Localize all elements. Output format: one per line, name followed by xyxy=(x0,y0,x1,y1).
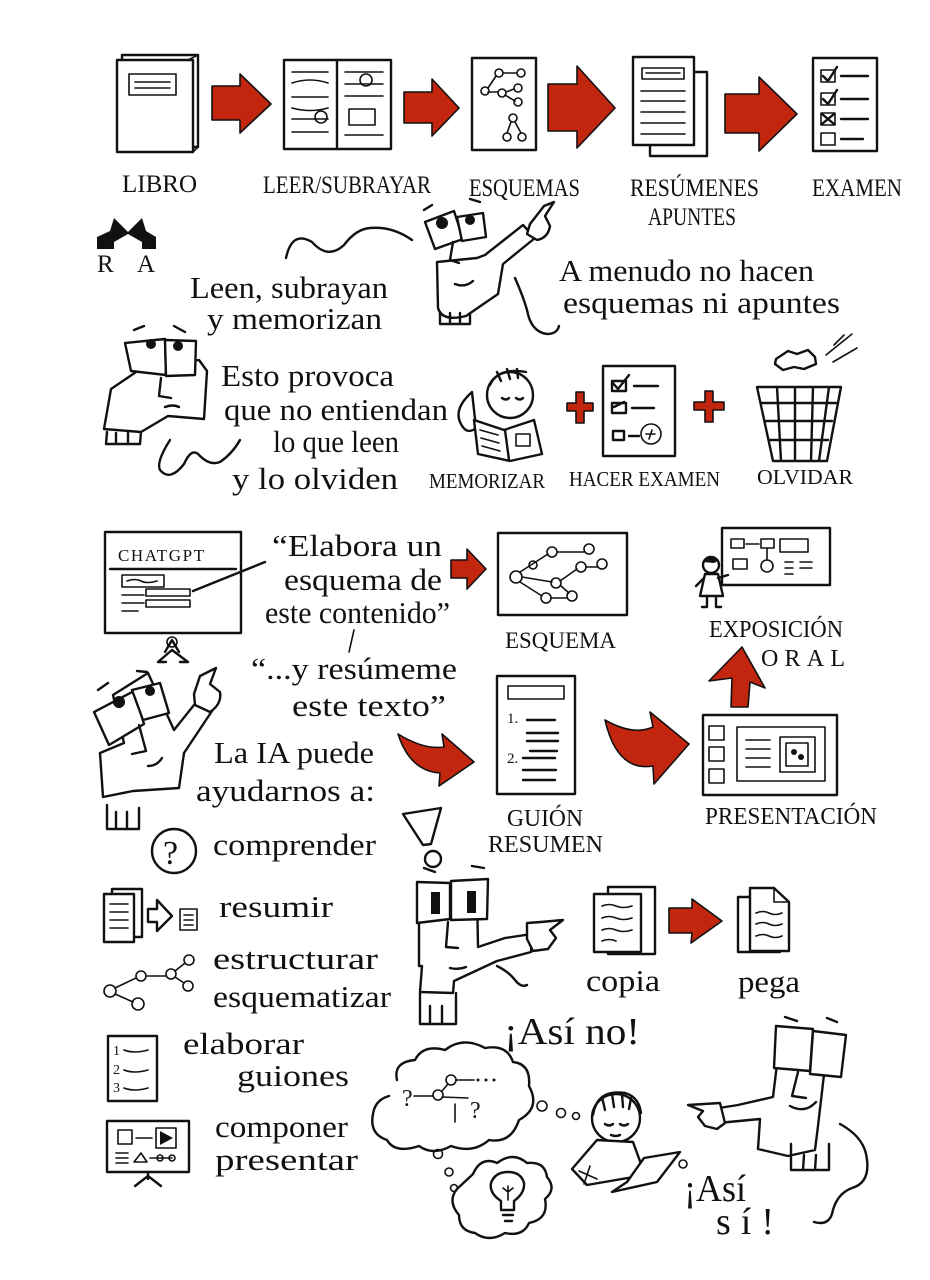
labels: copy, paste: copia xyxy=(586,963,660,998)
text: this way xyxy=(684,1168,774,1243)
text: often do not make outlines xyxy=(559,253,840,320)
text: often do not make outlines: esquemas ni apuntes xyxy=(563,285,840,320)
text: this causes: que no entiendan xyxy=(224,392,449,427)
text: often do not make outlines: A menudo no hacen xyxy=(559,253,815,288)
text: this way: ¡Así xyxy=(684,1168,746,1210)
arrow: summaries to exam xyxy=(725,77,797,151)
label: script summary xyxy=(488,805,603,858)
logo: RA xyxy=(97,218,156,278)
arrow: script to presentation xyxy=(605,712,689,784)
item: structure xyxy=(104,941,392,1014)
item: understand xyxy=(152,827,377,873)
labels: study process: APUNTES xyxy=(648,204,736,231)
character: warning, wrong way xyxy=(403,808,563,1024)
item: structure: estructurar xyxy=(213,941,379,976)
labels: study process: LIBRO xyxy=(122,171,197,198)
speech tail: reading xyxy=(286,228,412,258)
icon: exam checklist xyxy=(813,58,877,151)
icon: student on laptop xyxy=(572,1092,680,1192)
plus: first xyxy=(567,392,593,423)
text: this causes: Esto provoca xyxy=(221,358,394,393)
text: this causes: lo que leen xyxy=(273,424,399,459)
thought cloud: outline question: ? xyxy=(402,1086,413,1112)
item: understand: comprender xyxy=(213,827,377,862)
text: they read, underline and memorize xyxy=(190,270,389,336)
panel: script summary: 2. xyxy=(507,751,518,767)
text: AI can help: La IA puede xyxy=(214,735,374,770)
panel: presentation slide xyxy=(703,715,837,795)
item: compose and present xyxy=(107,1109,359,1186)
icon: outline sheet xyxy=(472,58,536,150)
labels: memorize, exam, forget: OLVIDAR xyxy=(757,465,853,489)
labels: memorize, exam, forget: MEMORIZAR xyxy=(429,469,545,493)
icon: underlined open book xyxy=(284,60,391,149)
text: this causes xyxy=(221,358,449,496)
logo: RA: RA xyxy=(97,251,155,278)
label: oral exposition: ORAL xyxy=(761,646,845,672)
thought bubbles xyxy=(434,1101,580,1192)
item: summarize xyxy=(104,889,334,942)
labels: copy, paste xyxy=(586,963,800,999)
item: structure: esquematizar xyxy=(213,979,392,1014)
text: AI can help: ayudarnos a: xyxy=(196,773,375,808)
arrow: read to outlines xyxy=(404,79,459,136)
thought cloud: outline question: ? xyxy=(470,1098,481,1124)
icon: taking an exam xyxy=(603,366,675,456)
icon: copy documents xyxy=(594,887,655,954)
text: prompt summary xyxy=(251,651,457,723)
arrow: presentation to oral xyxy=(709,647,765,707)
labels: study process: RESÚMENES xyxy=(630,174,759,202)
speech tail: often xyxy=(515,278,559,334)
label: presentation: PRESENTACIÓN xyxy=(705,803,877,830)
character: thinking xyxy=(104,326,240,475)
label: oral exposition xyxy=(709,616,845,672)
text: not like this: ¡Así no! xyxy=(504,1011,640,1053)
text: prompt summary: “...y resúmeme xyxy=(251,651,457,686)
labels: study process: EXAMEN xyxy=(812,175,902,202)
item: summarize: resumir xyxy=(219,889,334,924)
item: understand: ? xyxy=(163,835,178,872)
labels: study process: LEER/SUBRAYAR xyxy=(263,172,431,199)
character: pointing left, happy xyxy=(688,1017,867,1223)
labels: study process xyxy=(122,171,902,231)
text: this causes: y lo olviden xyxy=(232,461,399,496)
icon: wastebasket with crumpled paper xyxy=(757,334,857,461)
icon: paste document xyxy=(738,888,789,952)
text: prompt summary: este texto” xyxy=(292,688,446,723)
panel: script summary: 1. xyxy=(507,711,518,727)
arrow: prompt to outline xyxy=(451,549,486,589)
label: script summary: GUIÓN xyxy=(507,805,583,832)
item: scripts: 1 xyxy=(113,1044,120,1059)
labels: study process: ESQUEMAS xyxy=(469,175,580,202)
labels: memorize, exam, forget xyxy=(429,465,853,493)
text: prompt outline xyxy=(265,528,450,630)
item: scripts xyxy=(108,1026,349,1101)
text: this way: sí! xyxy=(716,1201,774,1243)
arrow: book to read xyxy=(212,74,271,133)
icon: oral presentation board xyxy=(696,528,830,607)
text: prompt outline: este contenido” xyxy=(265,595,450,630)
thought cloud: light bulb idea xyxy=(452,1157,552,1238)
panel: outline result xyxy=(498,533,627,615)
arrow: outlines to summaries xyxy=(548,66,615,148)
character: pointing teacher xyxy=(94,668,220,829)
item: compose and present: componer xyxy=(215,1109,349,1144)
text: prompt outline: “Elabora un xyxy=(272,528,443,563)
item: compose and present: presentar xyxy=(215,1142,359,1177)
item: scripts: guiones xyxy=(237,1058,349,1093)
thought cloud: outline question xyxy=(372,1042,533,1151)
text: they read, underline and memorize: Leen, subrayan xyxy=(190,270,389,305)
text: prompt outline: esquema de xyxy=(284,562,442,597)
labels: copy, paste: pega xyxy=(738,964,800,999)
item: scripts: elaborar xyxy=(183,1026,305,1061)
text: they read, underline and memorize: y memorizan xyxy=(207,301,383,336)
label: oral exposition: EXPOSICIÓN xyxy=(709,616,843,643)
panel: script summary xyxy=(497,676,575,794)
icon: book xyxy=(117,55,198,152)
arrow: prompt to script xyxy=(398,734,474,786)
arrow: copy to paste xyxy=(669,899,722,943)
icon: summary sheets xyxy=(633,57,707,156)
plus: second xyxy=(694,391,724,422)
label: outline: ESQUEMA xyxy=(505,628,616,653)
character: pointing up right xyxy=(424,199,554,324)
item: scripts: 3 xyxy=(113,1081,120,1096)
icon: person reading xyxy=(458,369,542,461)
icon: monitor with ChatGPT: CHATGPT xyxy=(118,546,205,565)
icon: monitor with ChatGPT xyxy=(105,532,265,662)
text: AI can help xyxy=(196,735,375,808)
item: scripts: 2 xyxy=(113,1063,120,1078)
label: script summary: RESUMEN xyxy=(488,832,603,858)
labels: memorize, exam, forget: HACER EXAMEN xyxy=(569,467,720,491)
